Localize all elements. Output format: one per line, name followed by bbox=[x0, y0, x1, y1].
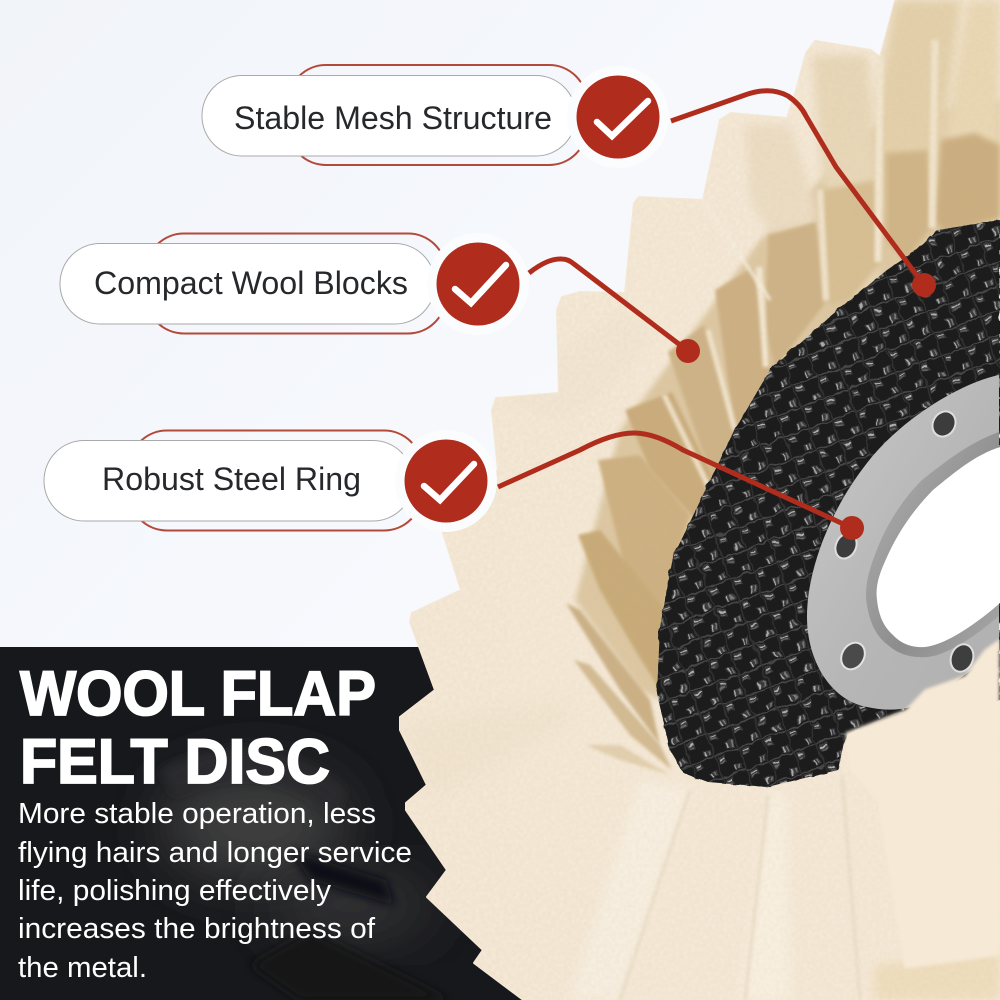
red offset outline bbox=[129, 430, 422, 530]
label text: Stable Mesh Structure bbox=[234, 100, 552, 136]
connector: ring bbox=[498, 433, 864, 540]
center hole bbox=[877, 447, 1000, 647]
red offset outline bbox=[146, 234, 446, 334]
rivet bottom left bbox=[836, 638, 870, 674]
callout: robust steel ring bbox=[44, 430, 497, 532]
description: flying hairs and longer service bbox=[18, 837, 412, 869]
label pill bbox=[60, 244, 435, 324]
description: the metal. bbox=[18, 952, 147, 984]
description: increases the brightness of bbox=[18, 913, 376, 945]
rivet top bbox=[928, 407, 960, 441]
check badge bbox=[567, 66, 669, 168]
check badge bbox=[395, 430, 497, 532]
description bbox=[18, 798, 412, 984]
rivet left bbox=[831, 530, 861, 562]
check badge bbox=[427, 233, 529, 335]
dark photo panel bbox=[0, 647, 530, 1000]
wool shading bbox=[400, 0, 1000, 1000]
rivet bottom right bbox=[947, 641, 977, 675]
label text: Compact Wool Blocks bbox=[94, 265, 408, 301]
title: WOOL FLAP bbox=[20, 659, 376, 729]
steel ring bbox=[807, 375, 1000, 710]
title bbox=[20, 659, 376, 797]
red offset outline bbox=[288, 65, 587, 165]
description: life, polishing effectively bbox=[18, 875, 332, 907]
title: FELT DISC bbox=[20, 727, 330, 797]
label text: Robust Steel Ring bbox=[102, 461, 361, 497]
description: More stable operation, less bbox=[18, 798, 376, 830]
mesh backing bbox=[650, 215, 1000, 795]
callout: stable mesh structure bbox=[202, 65, 669, 168]
front wool flap bbox=[846, 640, 999, 968]
callout: compact wool blocks bbox=[60, 233, 529, 335]
connector: mesh bbox=[671, 91, 936, 297]
wool flaps base bbox=[400, 1, 999, 999]
inner rim bbox=[866, 432, 999, 657]
label pill bbox=[202, 76, 576, 156]
connector: wool bbox=[529, 259, 700, 363]
label pill bbox=[44, 440, 413, 521]
wool flap disc bbox=[400, 0, 1000, 1000]
